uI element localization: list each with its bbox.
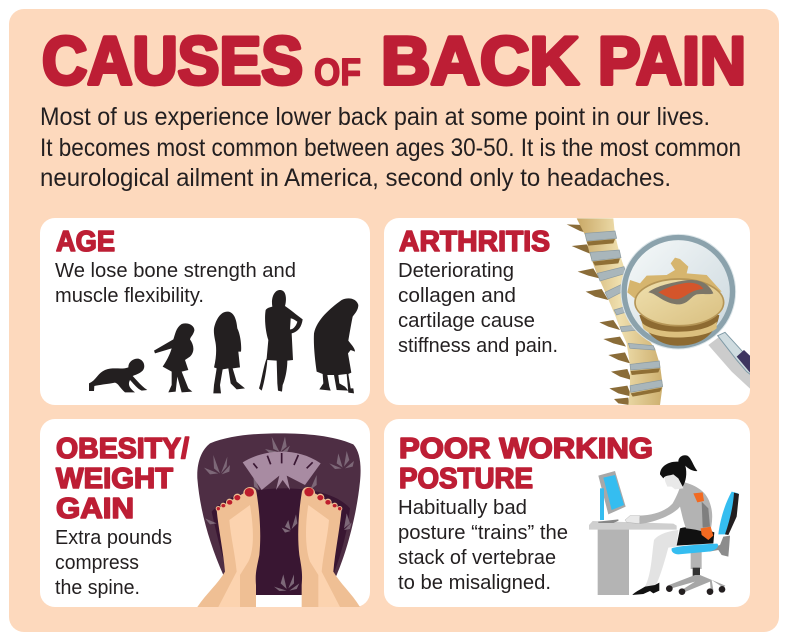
- heading: poor working posture: [399, 433, 653, 495]
- age description: muscle flexibility.: [55, 285, 204, 307]
- intro text: [40, 103, 741, 192]
- panel: obesity: [40, 419, 370, 607]
- left foot: [197, 487, 260, 607]
- spinous processes: [567, 224, 632, 405]
- hand: [625, 516, 640, 524]
- posture description: to be misaligned.: [398, 572, 551, 594]
- title: BACK: [381, 23, 579, 99]
- spine highlight: [693, 492, 713, 540]
- arthritis description: [398, 260, 558, 357]
- title: [42, 23, 746, 99]
- toenails: [217, 488, 341, 510]
- posture description: stack of vertebrae: [398, 547, 556, 569]
- obesity description: the spine.: [55, 577, 140, 599]
- icon: woman at desk: [589, 455, 739, 595]
- arthritis description: Deteriorating: [398, 260, 514, 282]
- title: CAUSES: [42, 23, 303, 99]
- shoe: [632, 583, 659, 595]
- torso: [639, 482, 712, 533]
- icon: feet on scale: [197, 433, 361, 607]
- vertebral column: [577, 218, 663, 405]
- chair: [691, 552, 702, 569]
- posture description: [398, 497, 568, 594]
- panel: poor working posture: [384, 419, 750, 607]
- skirt: [677, 527, 714, 546]
- posture description: Habitually bad: [398, 497, 527, 519]
- age description: We lose bone strength and: [55, 260, 296, 282]
- intro text: Most of us experience lower back pain at some point in our lives.: [40, 103, 710, 131]
- desk: [598, 528, 629, 595]
- panel: age: [40, 218, 370, 405]
- obesity description: compress: [55, 552, 139, 574]
- panel: arthritis: [384, 218, 753, 405]
- arthritis description: cartilage cause: [398, 310, 535, 332]
- icon: magnifying glass with vertebra: [621, 234, 753, 392]
- heading: obesity: WEIGHT: [56, 463, 173, 495]
- heading: age: AGE: [56, 226, 115, 258]
- title: OF: [314, 52, 361, 94]
- heading: obesity: GAIN: [56, 493, 134, 525]
- heading: obesity: OBESITY/: [56, 433, 189, 465]
- arthritis description: stiffness and pain.: [398, 335, 558, 357]
- heading: poor working posture: POSTURE: [399, 463, 533, 495]
- right foot: [298, 487, 360, 607]
- intro text: neurological ailment in America, second only to headaches.: [40, 164, 671, 192]
- obesity description: Extra pounds: [55, 527, 172, 549]
- age description: [55, 260, 296, 307]
- posture description: posture “trains” the: [398, 522, 568, 544]
- obesity description: [55, 527, 172, 599]
- heading: arthritis: ARTHRITIS: [399, 226, 550, 258]
- heading: poor working posture: POOR WORKING: [399, 433, 653, 465]
- monitor: [598, 471, 626, 514]
- icon: life stages silhouettes: [89, 290, 358, 393]
- woman leg: [645, 530, 678, 589]
- arthritis description: collagen and: [398, 285, 516, 307]
- head and hair: [664, 473, 683, 489]
- title: PAIN: [598, 23, 746, 99]
- heading: obesity: [56, 433, 189, 525]
- icon: spine: [567, 218, 663, 405]
- discs: [585, 231, 663, 392]
